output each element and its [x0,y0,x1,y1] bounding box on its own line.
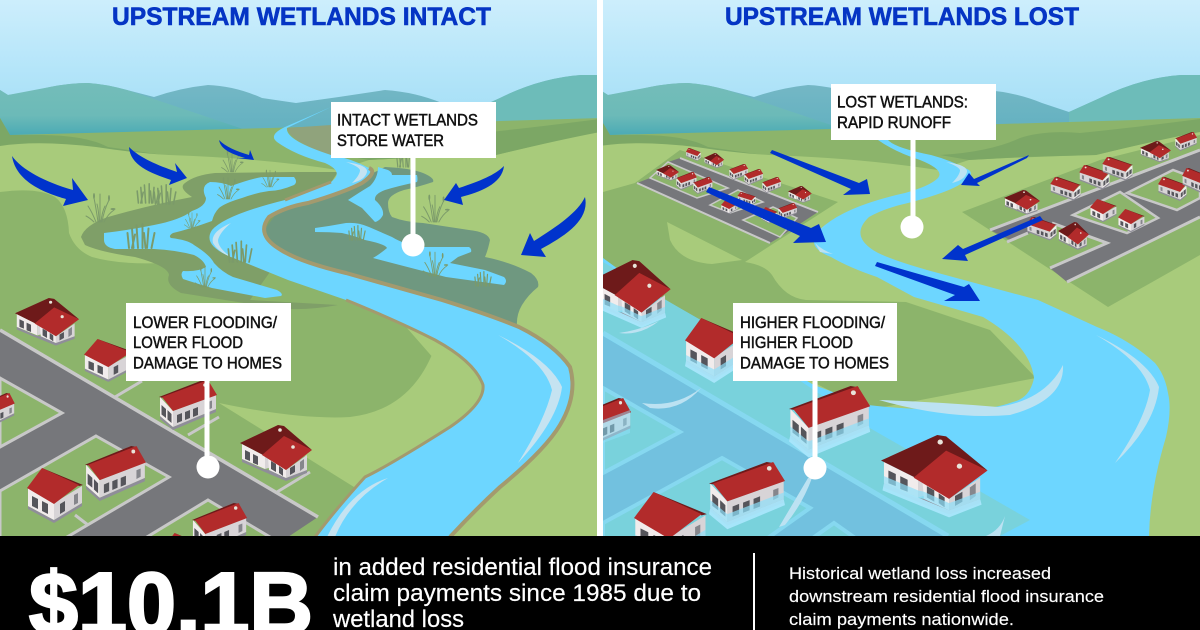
right wetland upper pool [348,167,418,222]
flooded lots [603,388,858,540]
title: lost: UPSTREAM WETLANDS LOST [725,3,1079,31]
summary text [789,564,1104,629]
callout: higher flooding: HIGHER FLOOD [740,334,853,352]
callout: lower flooding [126,303,291,478]
lower meadow and subdivision base [603,150,1036,410]
lower meadow [0,190,470,537]
callout: lost wetlands rapid runoff [831,84,996,238]
stat description: in added residential flood insurance [333,554,712,581]
callout: higher flooding [733,303,897,480]
summary text: downstream residential flood insurance [789,587,1104,606]
summary text: claim payments nationwide. [789,610,1014,629]
left subdivision streets [637,158,818,243]
river and flood water [603,140,1170,536]
callout: lost wetlands rapid runoff: LOST WETLANDS: [837,94,968,112]
callout: intact wetlands store water [331,102,496,256]
lower left bank [285,182,483,537]
left subdivision houses [656,148,812,224]
arrow c [961,155,1029,186]
flooded road [603,336,945,536]
arrow 2 [129,147,187,185]
lot 3 [146,498,271,536]
panel: upstream wetlands intact [0,0,600,560]
wetland tan shore [287,125,331,155]
flood swirls [619,162,1159,536]
right wetland lower pool [315,223,506,285]
right subdivision streets [990,150,1200,282]
arrow 1 [12,156,88,206]
arrow b [706,187,826,243]
runoff arrows into wetlands [12,140,586,257]
callout: lower flooding: DAMAGE TO HOMES [133,354,282,372]
flooded sidewalk [603,333,948,536]
title: intact: UPSTREAM WETLANDS INTACT [112,3,491,31]
flooded houses [580,260,988,567]
callout: intact wetlands store water: STORE WATER [337,132,444,150]
flooded lawn [603,262,1030,536]
arrow 4 [444,166,504,205]
light meadow patch [667,222,742,264]
riverside lawn [220,356,470,487]
sky, hills and ground [600,0,1200,540]
callout: higher flooding: DAMAGE TO HOMES [740,354,889,372]
callout: higher flooding: HIGHER FLOODING/ [740,314,885,332]
bottom bar [0,536,1200,630]
left wetland water [104,177,296,298]
right subdivision base [962,135,1200,307]
callout: intact wetlands store water: INTACT WETLANDS [337,112,478,130]
lot 1 [0,378,62,447]
callout: lower flooding: LOWER FLOODING/ [133,314,277,332]
arrow 5 [521,197,586,257]
summary text: Historical wetland loss increased [789,564,1051,583]
arrow d [942,216,1043,261]
vertical divider [753,553,755,630]
divider [597,0,603,536]
driveways [75,381,310,525]
arrow 3 [219,140,254,160]
right subdivision houses [1004,132,1200,250]
callout: lower flooding: LOWER FLOOD [133,334,243,352]
arrow e [875,262,980,301]
right wetland [262,167,538,327]
street network [0,330,318,540]
river [209,107,572,537]
sky, hills and ground [0,0,600,540]
stat description: claim payments since 1985 due to [333,580,701,607]
lot 2 [0,436,169,540]
callout: lost wetlands rapid runoff: RAPID RUNOFF [837,114,951,132]
panel: upstream wetlands lost [580,0,1200,567]
stat description [332,554,712,630]
houses [0,298,312,560]
left wetland [81,172,338,309]
river banks [264,168,572,537]
arrow a [770,150,870,195]
runoff arrows [706,150,1043,301]
river highlights [213,162,562,537]
wetland reeds [86,150,491,287]
